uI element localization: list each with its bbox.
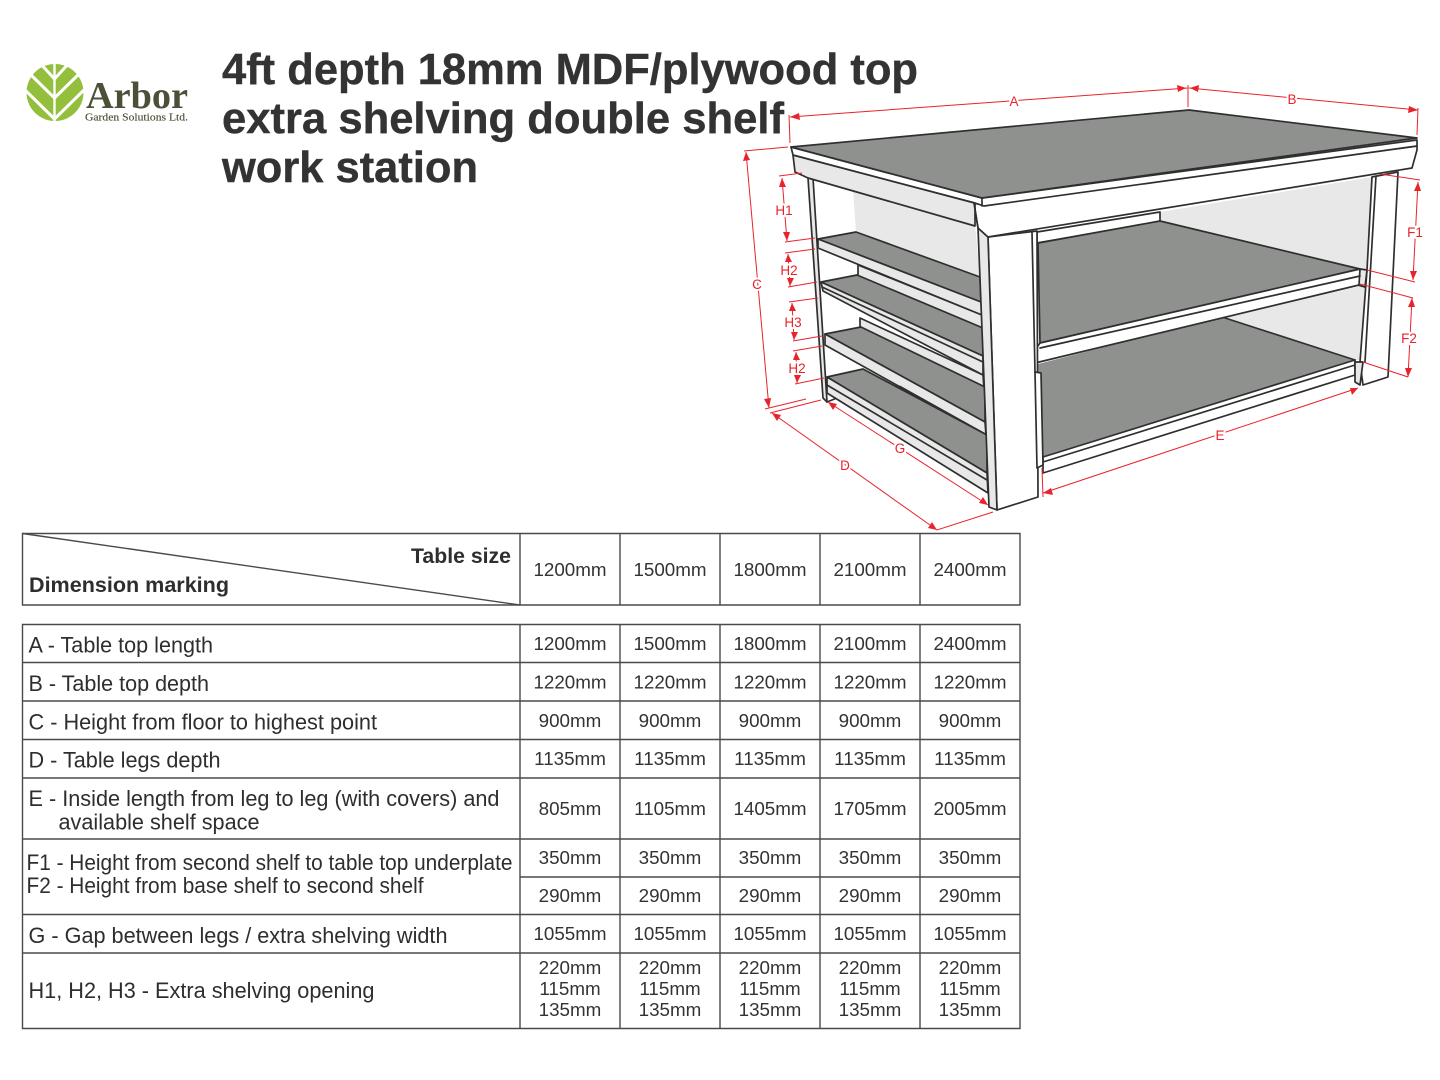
row A: 1800mm	[733, 633, 807, 654]
dimension F2	[1360, 284, 1417, 377]
icon: leaf roundel	[24, 62, 85, 123]
row H: 220mm	[839, 957, 901, 978]
dimension D: D	[840, 458, 850, 473]
row D	[28, 748, 1006, 772]
dimension D	[770, 400, 993, 530]
row A: A - Table top length	[28, 632, 213, 658]
back-right leg	[1360, 172, 1398, 385]
dimension A: A	[1009, 94, 1019, 109]
logo: Arbor Garden Solutions	[24, 62, 188, 124]
row A	[28, 632, 1007, 658]
row H: 220mm	[739, 957, 801, 978]
row D: D - Table legs depth	[28, 748, 220, 772]
dimension B	[1188, 85, 1418, 135]
main upper shelf	[1037, 212, 1367, 343]
side shelf 2	[821, 275, 984, 388]
row H: 135mm	[739, 999, 801, 1020]
row F1 and F2: 350mm	[739, 847, 801, 868]
row B	[28, 671, 1007, 696]
table top	[791, 110, 1417, 237]
dimension B: B	[1287, 92, 1297, 107]
row F1 and F2: 350mm	[939, 847, 1001, 868]
row F1 and F2: 350mm	[839, 847, 901, 868]
row H: H1, H2, H3 - Extra shelving opening	[28, 978, 374, 1003]
dimension H1: H1	[775, 203, 793, 218]
row H: 135mm	[539, 999, 601, 1020]
row D: 1135mm	[734, 748, 806, 769]
dimension H2 lower: H2	[788, 361, 806, 376]
dimensions table	[22, 624, 1020, 1028]
row D: 1135mm	[634, 748, 706, 769]
row A: 2400mm	[933, 633, 1007, 654]
row F1 and F2: 290mm	[839, 885, 901, 906]
row B: 1220mm	[733, 672, 807, 692]
table header: sizes: 2400mm	[933, 559, 1007, 580]
row F1 and F2: 290mm	[939, 885, 1001, 906]
title	[221, 45, 918, 192]
row H: 115mm	[539, 978, 601, 999]
row G: 1055mm	[533, 923, 607, 944]
row E: 1105mm	[634, 798, 706, 819]
dimension C	[743, 147, 806, 409]
row H: 115mm	[939, 978, 1001, 999]
title: 4ft depth 18mm MDF/plywood top	[222, 45, 918, 94]
row C: 900mm	[539, 710, 601, 731]
row E: 2005mm	[933, 798, 1007, 819]
dimension H3: H3	[784, 315, 802, 330]
table header: sizes: 1200mm	[533, 559, 607, 580]
row C: C - Height from floor to highest point	[28, 710, 377, 734]
dimension H1	[775, 173, 815, 242]
logo tagline: Garden Solutions Ltd.	[85, 112, 188, 124]
row F1 and F2: 290mm	[639, 885, 701, 906]
row H: 115mm	[739, 978, 801, 999]
dimension H2 lower	[788, 346, 824, 384]
table header: sizes: 1500mm	[633, 559, 707, 580]
dimension H2 upper	[780, 249, 817, 287]
row G	[28, 923, 1007, 948]
header label: table size: Table size	[411, 544, 511, 568]
row C: 900mm	[739, 710, 801, 731]
right back panel lower	[1223, 285, 1365, 360]
dimension G	[828, 402, 988, 505]
row E: available shelf space	[58, 810, 260, 834]
table header: sizes: 2100mm	[833, 559, 907, 580]
row F1 and F2	[26, 847, 1001, 906]
row D: 1135mm	[534, 748, 606, 769]
dimension E: E	[1215, 428, 1225, 443]
row H: 135mm	[839, 999, 901, 1020]
row F1 and F2: 290mm	[539, 885, 601, 906]
row H	[28, 957, 1001, 1020]
dimension C: C	[752, 277, 762, 292]
row C: 900mm	[839, 710, 901, 731]
row E: 805mm	[539, 798, 601, 819]
row H: 115mm	[839, 978, 901, 999]
dimension H2 upper: H2	[780, 263, 798, 278]
row G: 1055mm	[733, 923, 807, 944]
row F1 and F2: F2 - Height from base shelf to second shelf	[26, 873, 424, 898]
table header: sizes	[22, 534, 1020, 605]
row A: 1500mm	[633, 633, 707, 654]
row B: 1220mm	[533, 672, 607, 692]
row G: 1055mm	[833, 923, 907, 944]
table header: sizes: 1800mm	[733, 559, 807, 580]
front leg	[978, 228, 1043, 510]
row F1 and F2: 290mm	[739, 885, 801, 906]
row G: 1055mm	[633, 923, 707, 944]
main upper shelf front lip	[1035, 269, 1360, 363]
row F1 and F2: 350mm	[539, 847, 601, 868]
row F1 and F2: F1 - Height from second shelf to table top underplate	[26, 850, 512, 875]
row H: 115mm	[639, 978, 701, 999]
row C	[28, 710, 1001, 734]
row E: E - Inside length from leg to leg (with covers) and	[28, 786, 500, 811]
row H: 220mm	[939, 957, 1001, 978]
row B: 1220mm	[833, 672, 907, 692]
row B: 1220mm	[633, 672, 707, 692]
side base shelf	[827, 369, 988, 493]
row D: 1135mm	[934, 748, 1006, 769]
dimension F2: F2	[1401, 331, 1417, 346]
row G: 1055mm	[933, 923, 1007, 944]
left side back panel	[853, 190, 980, 277]
dimension G: G	[895, 441, 905, 456]
dimension F1	[1367, 174, 1423, 282]
row H: 135mm	[939, 999, 1001, 1020]
row D: 1135mm	[834, 748, 906, 769]
row G: G - Gap between legs / extra shelving width	[28, 923, 448, 948]
row C: 900mm	[939, 710, 1001, 731]
row B: 1220mm	[933, 672, 1007, 692]
dimension E	[1042, 388, 1358, 497]
workstation technical drawing	[743, 85, 1423, 530]
logo wordmark: Arbor	[86, 75, 188, 117]
back-left leg	[808, 178, 837, 402]
row F1 and F2: 350mm	[639, 847, 701, 868]
row H: 135mm	[639, 999, 701, 1020]
row A: 1200mm	[533, 633, 607, 654]
row B: B - Table top depth	[28, 671, 209, 696]
dimension H3	[784, 298, 822, 341]
row H: 220mm	[639, 957, 701, 978]
side shelf 3	[825, 327, 986, 435]
row E: 1405mm	[733, 798, 807, 819]
dimension A	[789, 85, 1188, 143]
row C: 900mm	[639, 710, 701, 731]
row A: 2100mm	[833, 633, 907, 654]
main lower shelf	[1038, 317, 1363, 473]
right back panel upper	[1160, 177, 1372, 270]
title: work station	[221, 143, 478, 192]
side shelf 1	[818, 232, 982, 328]
dimension F1: F1	[1407, 225, 1423, 240]
row E	[28, 786, 1007, 834]
row E: 1705mm	[833, 798, 907, 819]
row H: 220mm	[539, 957, 601, 978]
title: extra shelving double shelf	[222, 94, 784, 143]
header label: dimension marking: Dimension marking	[29, 573, 229, 597]
